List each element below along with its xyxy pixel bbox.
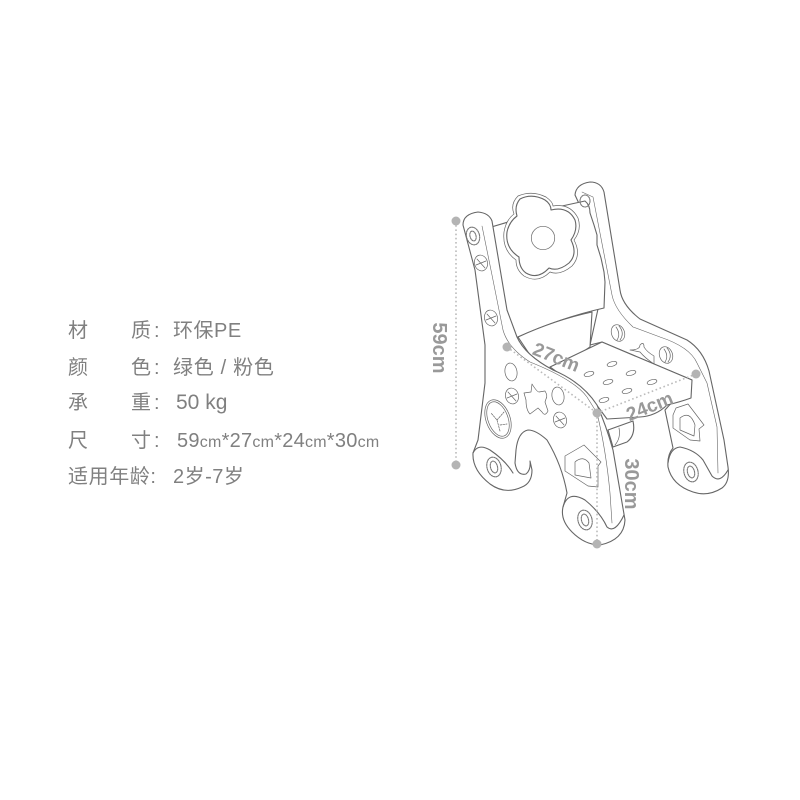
ornament: flower badges [464, 195, 700, 531]
left side frame [463, 212, 625, 545]
ornament: striped circles [609, 323, 675, 365]
spec: color: 绿色 / 粉色 [173, 357, 275, 379]
spec: material: 环保PE [173, 320, 242, 342]
dimension lines [456, 221, 696, 544]
spec: color: 颜 [68, 357, 88, 379]
dimension label: 30cm: 30cm [620, 458, 642, 510]
backrest panel [488, 201, 605, 340]
seat holes [584, 360, 657, 404]
spec: load: 重: [131, 392, 163, 414]
spec: color: 色: [131, 357, 163, 379]
ornament: plain ovals [504, 362, 518, 382]
spec: load: 50 kg [176, 391, 227, 414]
spec: material: 质: [131, 320, 163, 342]
under-seat support [608, 421, 634, 447]
spec: size: 59cm*27cm*24cm*30cm [177, 430, 379, 452]
spec: color [68, 357, 275, 379]
spec: load [68, 391, 227, 414]
ornament: fish [630, 343, 654, 364]
flower ornament [504, 193, 579, 279]
dimension label: 24cm: 24cm [624, 388, 676, 426]
dimension dots [452, 216, 700, 548]
spec: age: 2岁-7岁 [173, 466, 244, 488]
seat [550, 342, 692, 419]
spec: material: 材 [68, 320, 88, 342]
spec: size [68, 430, 379, 452]
dimension label: 59cm: 59cm [428, 322, 450, 374]
dimension label: 27cm: 27cm [530, 339, 582, 377]
side ornaments [464, 195, 704, 531]
chair illustration [463, 182, 728, 545]
spec: age: 适用年龄: [68, 466, 157, 488]
ornament: houses [565, 404, 704, 487]
spec: material [68, 320, 242, 342]
ornament: crossed circles [473, 254, 568, 429]
spec: age [68, 466, 244, 488]
right rail [575, 182, 728, 494]
spec: size: 寸: [131, 430, 163, 452]
ornament: star [524, 384, 548, 414]
spec: size: 尺 [68, 430, 88, 452]
spec: load: 承 [68, 392, 88, 414]
ornament: tree badge [480, 396, 516, 442]
spec list [68, 320, 379, 488]
backrest lower panel [518, 312, 592, 372]
